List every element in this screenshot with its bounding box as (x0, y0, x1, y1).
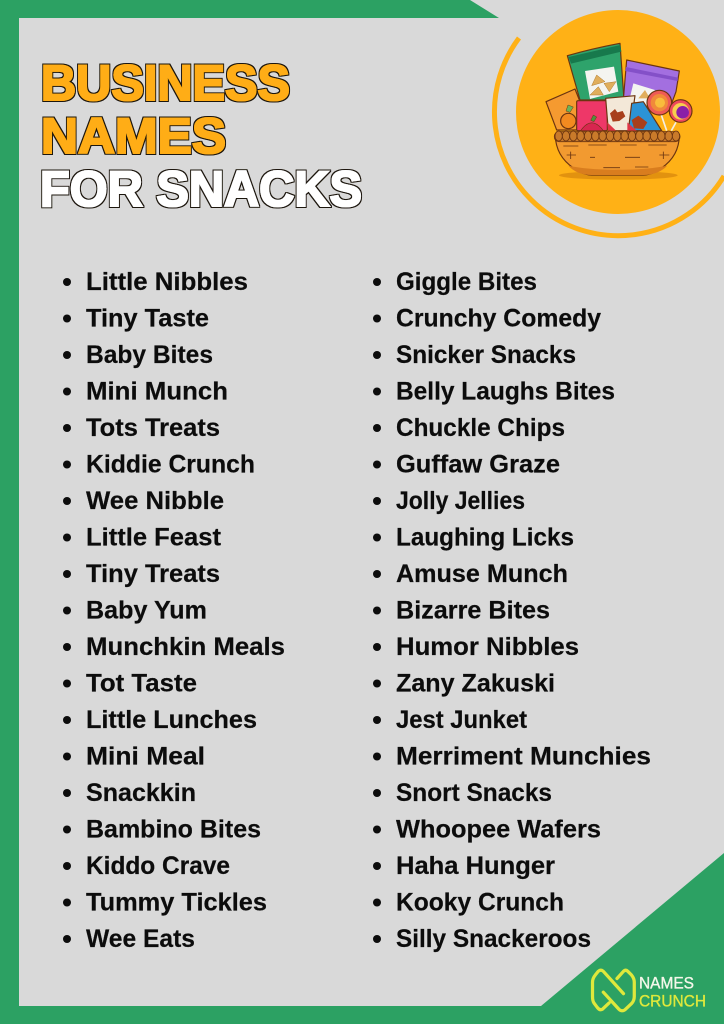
names: right column: Silly Snackeroos (396, 925, 591, 953)
bullets: right column (373, 278, 381, 943)
names: right column: Jest Junket (396, 706, 528, 734)
names: left column: Little Nibbles (86, 268, 248, 296)
names: left column: Mini Munch (86, 378, 228, 406)
names: left column: Munchkin Meals (86, 633, 285, 661)
names: right column: Humor Nibbles (396, 633, 579, 661)
names: right column: Haha Hunger (396, 852, 555, 880)
names: right column: Jolly Jellies (396, 487, 525, 515)
logo text: crunch: CRUNCH (639, 992, 706, 1010)
names: left column: Mini Meal (86, 742, 205, 770)
decorative arc around circle (494, 38, 724, 236)
names: right column: Crunchy Comedy (396, 304, 601, 332)
icon: snack basket (546, 43, 692, 180)
names: right column: Guffaw Graze (396, 450, 560, 478)
names: left column: Tots Treats (86, 414, 220, 442)
basket shadow (559, 171, 678, 180)
red snack pack (577, 101, 607, 131)
names: left column (86, 268, 285, 953)
logo text: names: NAMES (639, 974, 694, 992)
names: right column: Bizarre Bites (396, 596, 550, 624)
lollipop sticks (661, 115, 676, 131)
names: right column: Belly Laughs Bites (396, 378, 615, 406)
list: right column (373, 268, 651, 953)
names: left column: Little Lunches (86, 706, 257, 734)
names: left column: Wee Nibble (86, 487, 224, 515)
lollipop orange (647, 90, 672, 115)
basket rim (554, 131, 680, 142)
icon circle (516, 10, 720, 214)
names: left column: Tot Taste (86, 670, 197, 698)
orange juice box (546, 89, 579, 130)
names: right column: Giggle Bites (396, 268, 537, 296)
green frame top and left (0, 0, 499, 1024)
names: left column: Bambino Bites (86, 816, 261, 844)
names: left column: Baby Bites (86, 341, 213, 369)
lollipop purple (669, 100, 692, 122)
bullets: left column (63, 278, 71, 943)
names: right column: Amuse Munch (396, 560, 568, 588)
names: left column: Baby Yum (86, 596, 207, 624)
purple chip bag (623, 60, 679, 107)
names: right column: Zany Zakuski (396, 670, 555, 698)
list: left column (63, 268, 285, 953)
names: right column (396, 268, 651, 953)
title line: for snacks: FOR SNACKS (40, 161, 362, 217)
names: left column: Tiny Treats (86, 560, 220, 588)
title line: business: BUSINESS (41, 55, 290, 111)
names: right column: Merriment Munchies (396, 742, 651, 770)
names: left column: Snackkin (86, 779, 196, 807)
basket bowl (556, 140, 679, 175)
names: left column: Wee Eats (86, 925, 195, 953)
title (40, 55, 362, 217)
names: right column: Snicker Snacks (396, 341, 576, 369)
names: left column: Little Feast (86, 524, 222, 552)
names: left column: Tiny Taste (86, 304, 209, 332)
names: left column: Kiddie Crunch (86, 450, 255, 478)
names: left column: Tummy Tickles (86, 888, 267, 916)
names: right column: Chuckle Chips (396, 414, 565, 442)
green frame bottom with corner triangle (0, 853, 724, 1024)
names: right column: Snort Snacks (396, 779, 552, 807)
names: right column: Laughing Licks (396, 524, 574, 552)
blue snack pack (627, 102, 662, 131)
title line: names: NAMES (41, 108, 226, 164)
green chip bag (567, 43, 624, 100)
logo: names crunch (593, 970, 706, 1011)
names: left column: Kiddo Crave (86, 852, 230, 880)
names: right column: Kooky Crunch (396, 888, 564, 916)
logo mark (593, 970, 634, 1011)
names: right column: Whoopee Wafers (396, 816, 601, 844)
white choco pack (606, 96, 635, 131)
